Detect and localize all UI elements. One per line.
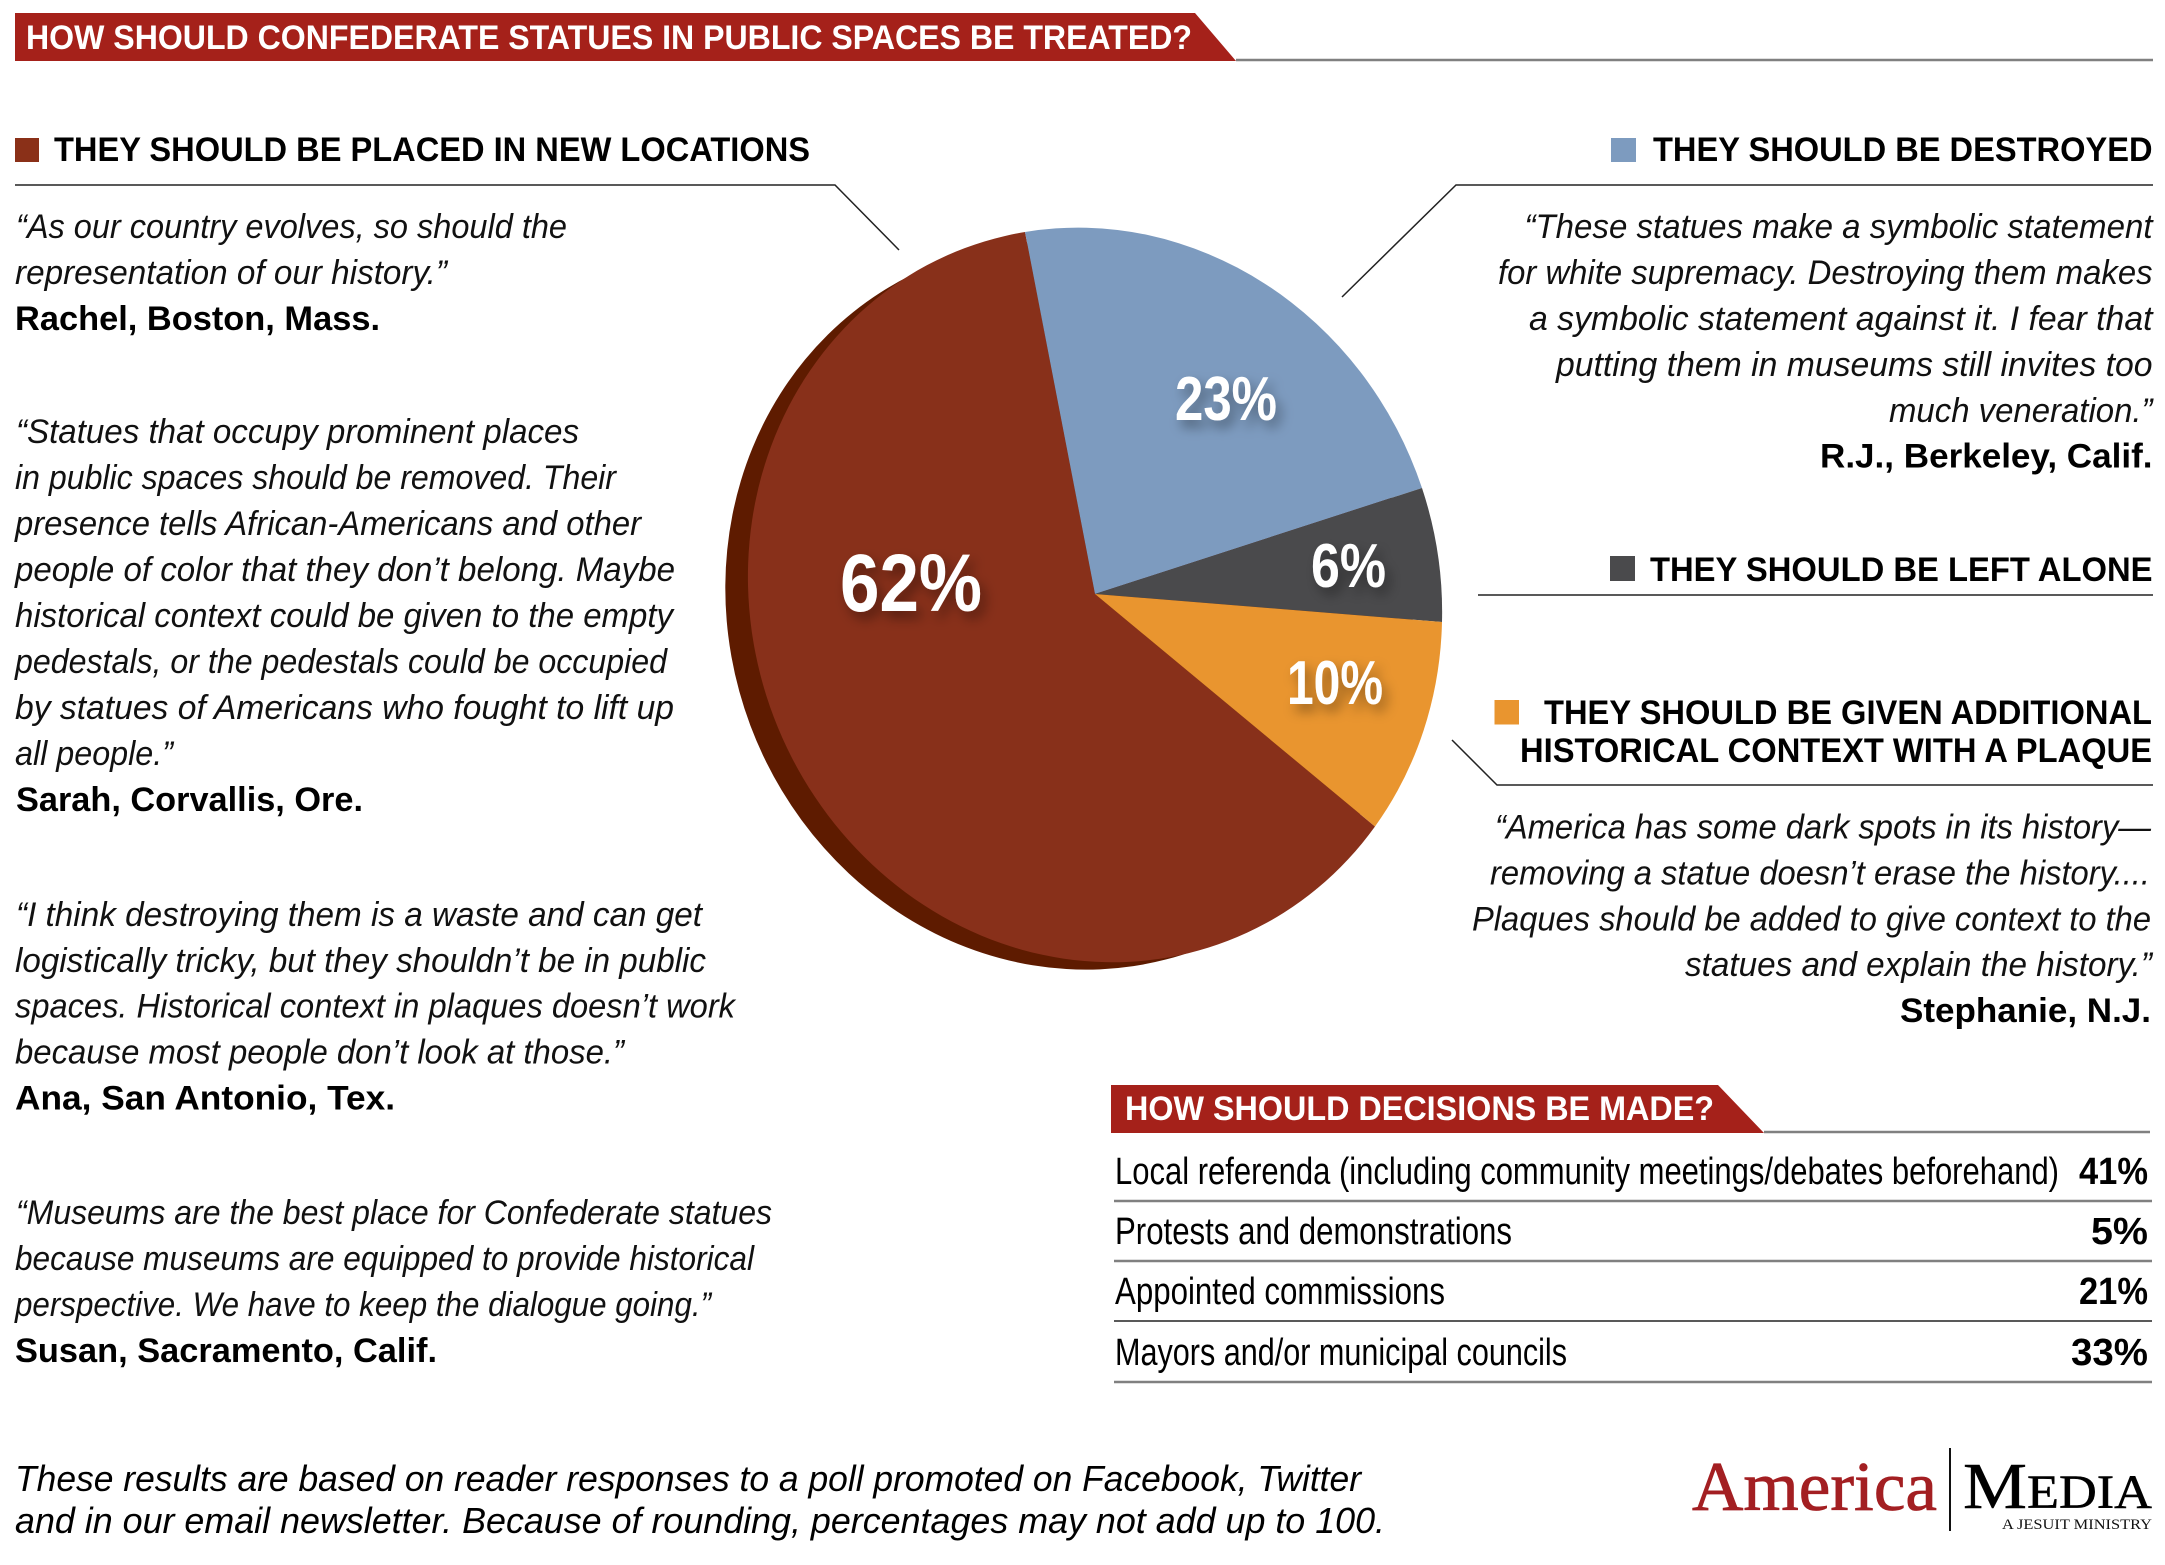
- quote: Sarah: [14, 413, 675, 819]
- leader line: new locations: [15, 185, 899, 250]
- quote: Susan: “Museums are the best place for Confederate statues: [16, 1194, 772, 1232]
- logo: America Media: MEDIA: [1963, 1450, 2152, 1523]
- row: protests: [1114, 1211, 2152, 1261]
- quote: Sarah: all people.”: [15, 735, 175, 773]
- legend heading: new locations: THEY SHOULD BE PLACED IN NEW LOCATIONS: [54, 131, 810, 169]
- legend heading: plaque: [1494, 694, 2152, 770]
- quote: Ana: spaces. Historical context in plaques doesn’t work: [15, 988, 737, 1026]
- logo: America Media: [1692, 1448, 2152, 1533]
- quote: Ana: because most people don’t look at those.”: [15, 1034, 626, 1072]
- decisions banner: HOW SHOULD DECISIONS BE MADE?: [1125, 1090, 1714, 1128]
- quote: R.J.: for white supremacy. Destroying them makes: [1498, 254, 2152, 292]
- title banner: [15, 13, 2153, 61]
- footnote: These results are based on reader responses to a poll promoted on Facebook, Twitter: [15, 1458, 1363, 1499]
- label: 10%: 10%: [1287, 649, 1383, 718]
- logo: America Media: America: [1692, 1449, 1937, 1526]
- quote: Sarah: people of color that they don’t belong. Maybe: [14, 551, 675, 589]
- panel: destroyed: [1342, 131, 2154, 476]
- row: mayors: [1114, 1332, 2152, 1382]
- quote: Sarah: Sarah, Corvallis, Ore.: [16, 781, 363, 819]
- row: local referenda: 41%: [2079, 1151, 2148, 1193]
- row: mayors: Mayors and/or municipal councils: [1115, 1332, 1567, 1374]
- row: commissions: 21%: [2079, 1271, 2148, 1313]
- logo: America Media: A JESUIT MINISTRY: [2002, 1517, 2152, 1533]
- leader line: plaque: [1452, 740, 2153, 785]
- pie chart: [621, 143, 1517, 1069]
- row: protests: Protests and demonstrations: [1115, 1211, 1512, 1253]
- quote: R.J.: much veneration.”: [1889, 392, 2154, 430]
- panel: additional context: [1452, 694, 2154, 1030]
- slice: destroyed 23%: [1025, 228, 1422, 594]
- label: 23%: 23%: [1175, 365, 1277, 434]
- quote: Sarah: “Statues that occupy prominent places: [16, 413, 579, 451]
- leader line: destroyed: [1342, 185, 2153, 297]
- quote: Susan: because museums are equipped to provide historical: [15, 1240, 755, 1278]
- quote: Stephanie: [1472, 808, 2154, 1030]
- slice: plaque 10%: [1095, 594, 1442, 826]
- legend heading: destroyed: THEY SHOULD BE DESTROYED: [1653, 131, 2152, 169]
- slice: left alone 6%: [1095, 488, 1442, 622]
- quote: Stephanie: Stephanie, N.J.: [1900, 992, 2151, 1030]
- quote: Ana: “I think destroying them is a waste and can get: [16, 896, 704, 934]
- quote: Sarah: in public spaces should be removed. Their: [15, 459, 618, 497]
- quote: Stephanie: removing a statue doesn’t erase the history....: [1490, 854, 2150, 892]
- row: protests: 5%: [2091, 1211, 2148, 1253]
- footnote: [15, 1458, 1385, 1541]
- quote: Sarah: by statues of Americans who fought to lift up: [15, 689, 674, 727]
- quote: Susan: [14, 1194, 772, 1370]
- row: mayors: 33%: [2071, 1332, 2148, 1374]
- quote: R.J.: “These statues make a symbolic statement: [1524, 208, 2154, 246]
- quote: Sarah: historical context could be given to the empty: [15, 597, 675, 635]
- row: commissions: [1114, 1271, 2152, 1321]
- decisions banner: [1111, 1085, 2150, 1133]
- quote: Stephanie: Plaques should be added to give context to the: [1472, 900, 2151, 938]
- quote: Rachel: representation of our history.”: [15, 254, 449, 292]
- quote: Ana: logistically tricky, but they shouldn’t be in public: [15, 942, 706, 980]
- quote: Rachel: Rachel, Boston, Mass.: [15, 300, 380, 338]
- row: commissions: Appointed commissions: [1115, 1271, 1445, 1313]
- quote: Sarah: presence tells African-Americans and other: [14, 505, 643, 543]
- quote: Ana: Ana, San Antonio, Tex.: [15, 1080, 395, 1118]
- quote: Ana: [15, 896, 737, 1118]
- legend heading: plaque: HISTORICAL CONTEXT WITH A PLAQUE: [1520, 732, 2152, 770]
- panel: left alone: [1478, 551, 2153, 595]
- label: 6%: 6%: [1311, 532, 1386, 601]
- quote: Rachel: “As our country evolves, so should the: [16, 208, 567, 246]
- quote: R.J.: R.J., Berkeley, Calif.: [1820, 438, 2152, 476]
- quote: Stephanie: “America has some dark spots in its history—: [1495, 808, 2152, 846]
- panel: how should decisions be made: [1111, 1085, 2152, 1382]
- rule: left alone: [1478, 594, 2153, 596]
- legend heading: plaque: THEY SHOULD BE GIVEN ADDITIONAL: [1544, 694, 2152, 732]
- quote: R.J.: [1498, 208, 2154, 476]
- quote: Susan: perspective. We have to keep the dialogue going.”: [14, 1286, 713, 1324]
- panel: placed in new locations: [14, 131, 899, 1370]
- title banner: HOW SHOULD CONFEDERATE STATUES IN PUBLIC SPACES BE TREATED?: [26, 19, 1192, 57]
- quote: Sarah: pedestals, or the pedestals could be occupied: [14, 643, 668, 681]
- quote: R.J.: putting them in museums still invites too: [1555, 346, 2152, 384]
- quote: Susan: Susan, Sacramento, Calif.: [15, 1332, 437, 1370]
- legend heading: left alone: THEY SHOULD BE LEFT ALONE: [1650, 551, 2152, 589]
- slice: new locations 62%: [748, 232, 1375, 962]
- quote: Rachel: [15, 208, 567, 338]
- footnote: and in our email newsletter. Because of rounding, percentages may not add up to 100.: [15, 1500, 1385, 1541]
- quote: Stephanie: statues and explain the history.”: [1685, 946, 2154, 984]
- label: 62%: 62%: [840, 538, 982, 629]
- quote: R.J.: a symbolic statement against it. I fear that: [1529, 300, 2154, 338]
